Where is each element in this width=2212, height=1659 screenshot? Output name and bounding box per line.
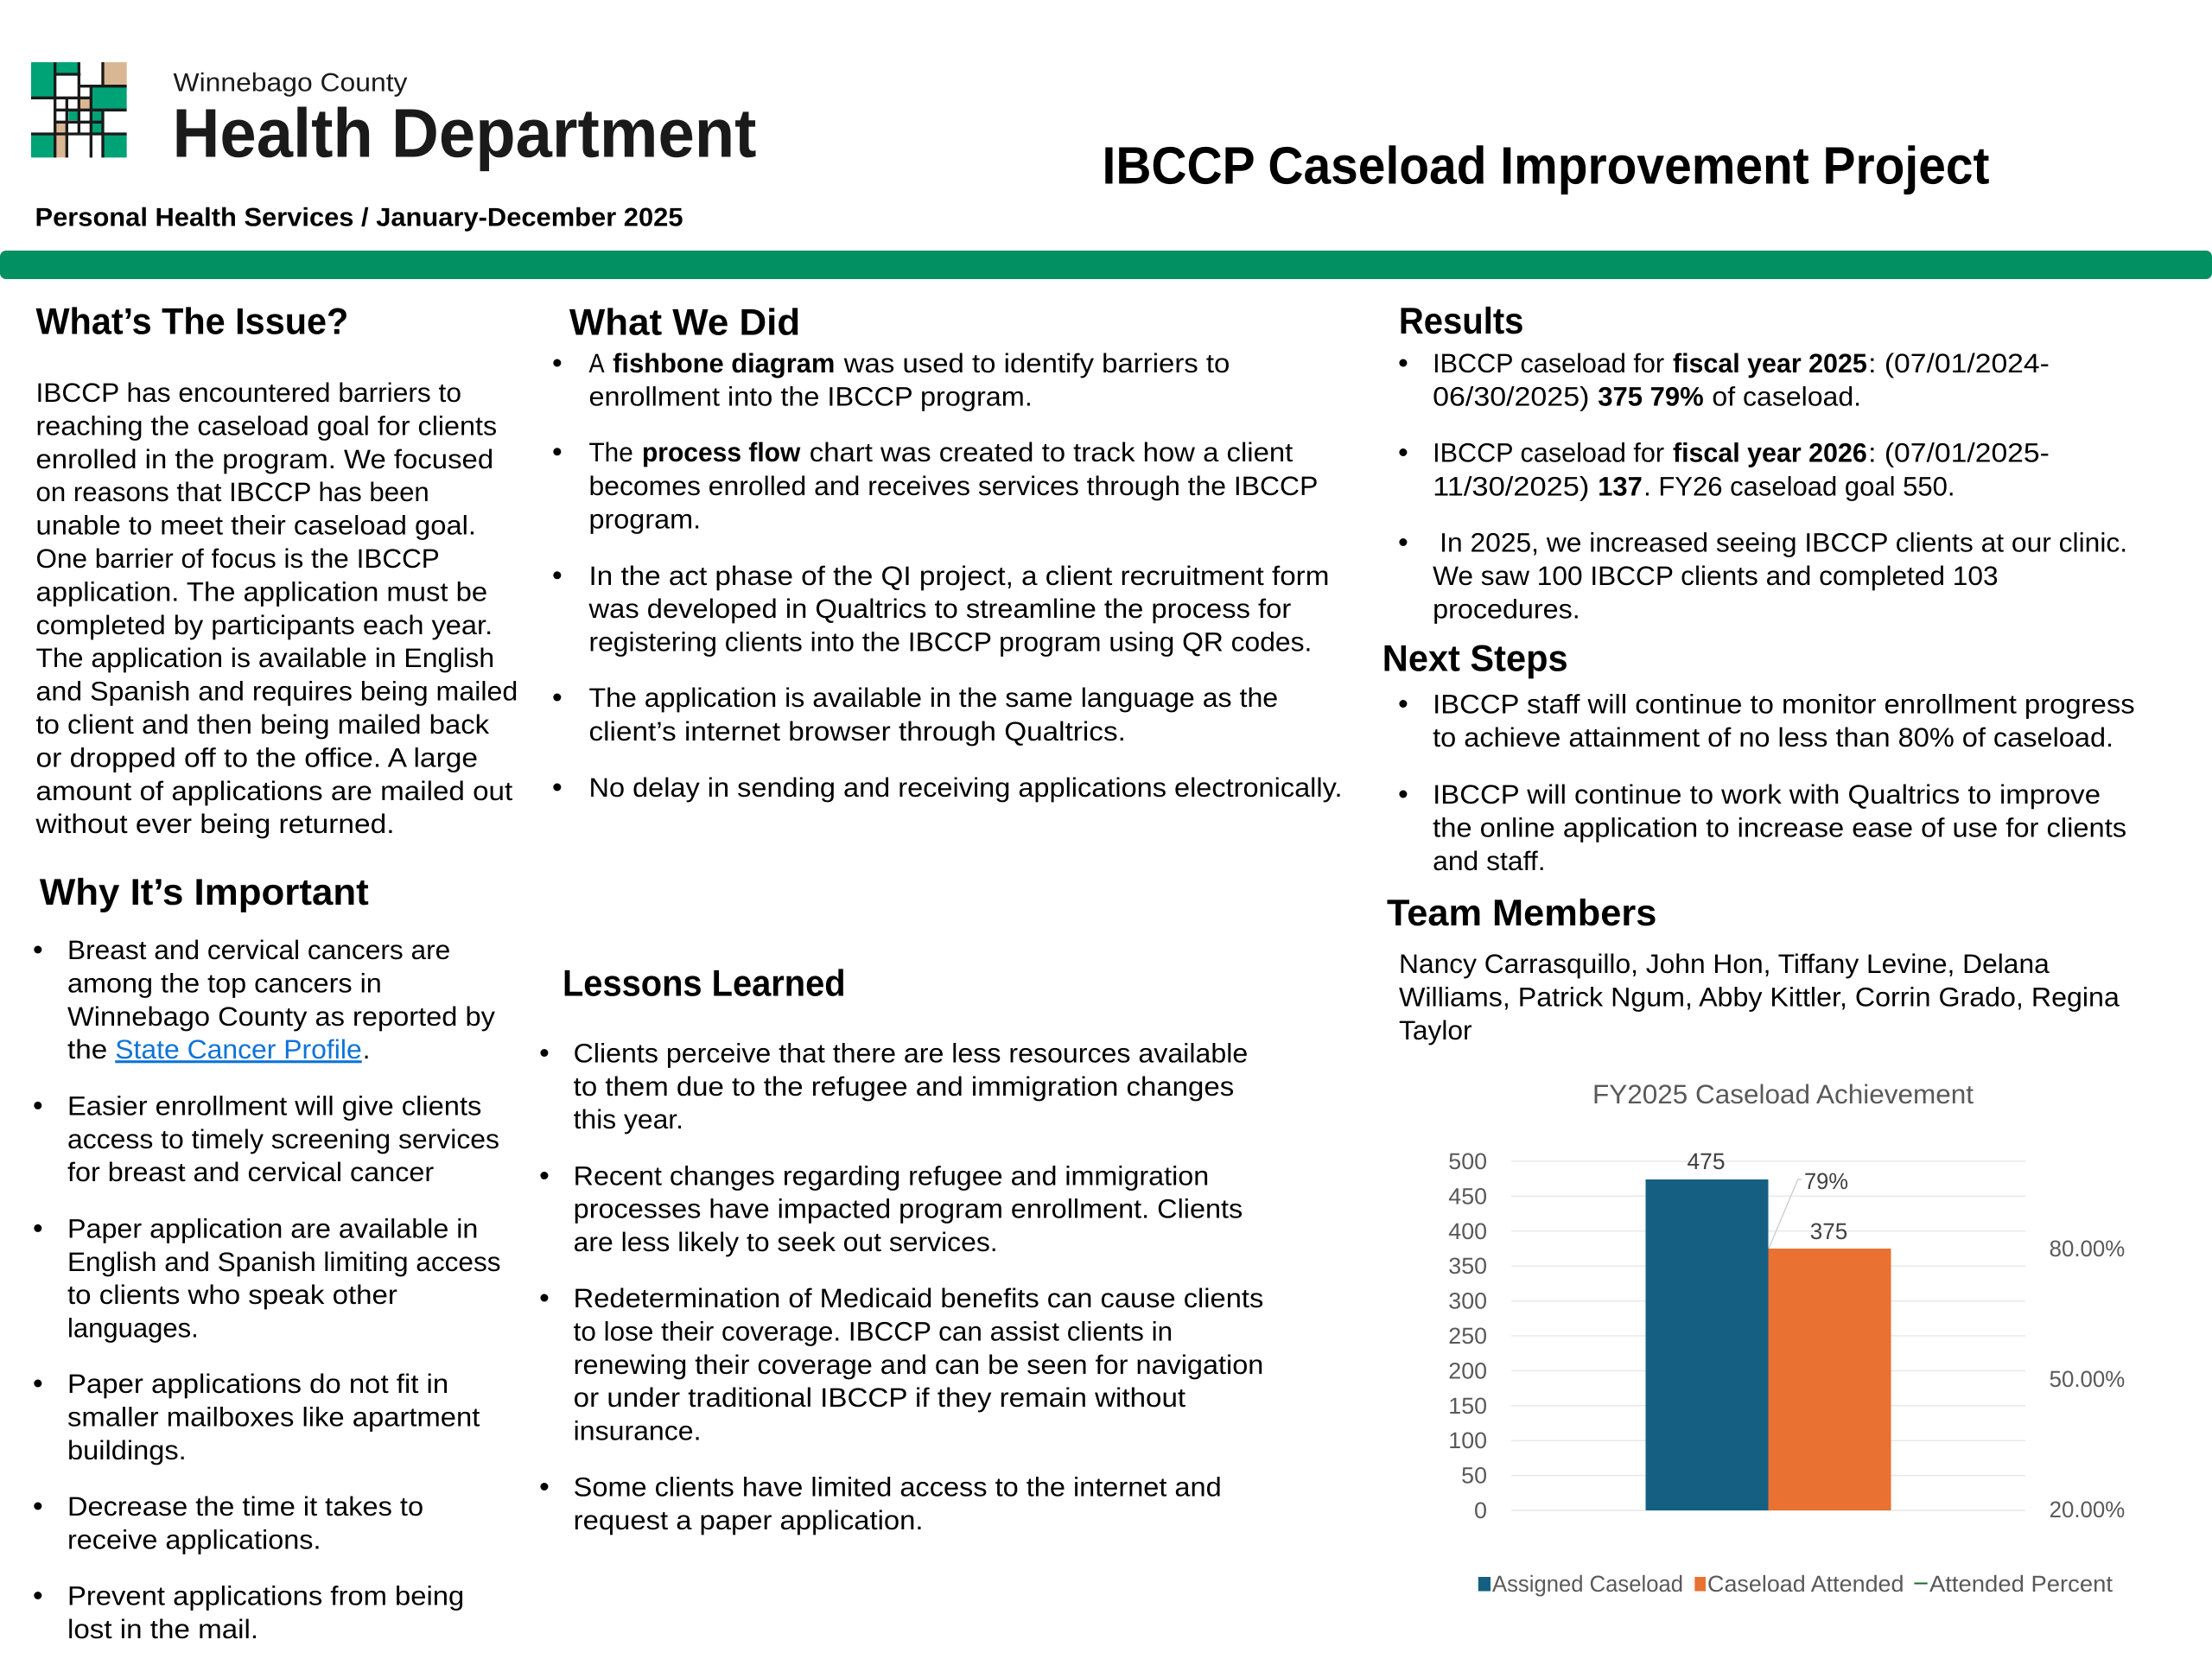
text block: names: Williams, Patrick Ngum, Abby Kittler, Corrin Grado, Regina <box>1399 982 2120 1013</box>
right axis labels: 20.00% <box>2050 1497 2125 1522</box>
list: actions: registering clients into the IBCCP program using QR codes. <box>588 627 1312 658</box>
list: actions: chart was created to track how a client <box>810 437 1294 467</box>
bar: caseload attended 375 <box>1768 1249 1891 1510</box>
list: lessons: renewing their coverage and can be seen for navigation <box>574 1350 1263 1380</box>
text block: names: Taylor <box>1399 1015 1472 1046</box>
list: results: 375 79% <box>1598 381 1704 411</box>
text block: issue description: application. The application must be <box>35 576 487 607</box>
text block: names: Nancy Carrasquillo, John Hon, Tiffany Levine, Delana <box>1399 949 2050 979</box>
list: results: IBCCP caseload for <box>1433 348 1664 378</box>
list: lessons: Some clients have limited access to the internet and <box>574 1472 1222 1502</box>
left axis labels: 50 <box>1461 1463 1487 1489</box>
list: lessons: Recent changes regarding refugee and immigration <box>574 1161 1209 1191</box>
title: IBCCP Caseload Improvement Project <box>1103 137 1989 195</box>
data label 475: 475 <box>1687 1148 1725 1174</box>
list: lessons: Clients perceive that there are less resources available <box>574 1039 1248 1068</box>
list: next steps: and staff. <box>1433 846 1546 876</box>
list: next steps <box>1399 690 2135 876</box>
left axis labels: 300 <box>1448 1288 1487 1314</box>
list: results: : (07/01/2025- <box>1868 437 2050 468</box>
list: reasons: Easier enrollment will give clients <box>67 1090 481 1121</box>
data label 79%: 79% <box>1804 1168 1848 1194</box>
panel: lessons learned <box>540 963 1263 1535</box>
list: lessons: insurance. <box>574 1416 701 1446</box>
list: reasons: Winnebago County as reported by <box>67 1001 495 1032</box>
text block: names <box>1399 949 2120 1046</box>
text block: issue description: completed by participants each year. <box>35 610 493 640</box>
left axis labels: 150 <box>1448 1393 1487 1419</box>
list: reasons: receive applications. <box>67 1524 321 1554</box>
text block: issue description: and Spanish and requires being mailed <box>35 677 518 707</box>
list: results: 06/30/2025) <box>1433 381 1589 411</box>
left axis labels: 200 <box>1448 1357 1487 1383</box>
list: reasons: languages. <box>67 1313 199 1344</box>
list: results: In 2025, we increased seeing IBCCP clients at our clinic. <box>1440 527 2127 558</box>
heading: lessons learned: Lessons Learned <box>563 963 846 1005</box>
left axis labels <box>1448 1148 1487 1523</box>
list: results: : (07/01/2024- <box>1868 348 2050 378</box>
list: next steps: to achieve attainment of no less than 80% of caseload. <box>1433 722 2113 753</box>
list: results: . FY26 caseload goal 550. <box>1643 472 1955 501</box>
list: reasons: the <box>67 1034 107 1065</box>
list: reasons: access to timely screening services <box>67 1124 499 1154</box>
right axis labels <box>2050 1236 2125 1522</box>
list: lessons: this year. <box>574 1104 683 1135</box>
legend <box>1478 1571 2113 1597</box>
panel: results <box>1399 301 2127 624</box>
green divider bar <box>0 251 2212 279</box>
logo text: Winnebago County: Winnebago County <box>173 69 408 97</box>
text block: issue description: One barrier of focus is the IBCCP <box>35 543 440 574</box>
logo text: Health Department: Health Department <box>173 95 757 171</box>
header <box>31 62 1989 232</box>
list: results <box>1399 348 2127 624</box>
bar chart: FY2025 caseload achievement <box>1448 1079 2125 1597</box>
list: actions: becomes enrolled and receives services through the IBCCP <box>588 471 1318 501</box>
list: reasons: English and Spanish limiting access <box>67 1247 500 1277</box>
text block: issue description: without ever being returned. <box>35 809 395 839</box>
list: actions: program. <box>588 505 701 535</box>
heading: next steps: Next Steps <box>1382 638 1568 679</box>
subtitle: Personal Health Services / January-December 2025 <box>35 204 683 232</box>
list: lessons: or under traditional IBCCP if they remain without <box>574 1382 1186 1413</box>
list: next steps: IBCCP staff will continue to monitor enrollment progress <box>1433 690 2135 719</box>
list: reasons: State Cancer Profile <box>115 1034 362 1065</box>
list: reasons: buildings. <box>67 1435 187 1465</box>
list: reasons: Paper application are available in <box>67 1213 478 1243</box>
list: lessons <box>540 1039 1263 1535</box>
list: actions: No delay in sending and receiving applications electronically. <box>588 772 1342 803</box>
list: results: 137 <box>1598 472 1643 501</box>
heading: what's the issue: What’s The Issue? <box>35 301 348 342</box>
list: reasons: to clients who speak other <box>67 1280 397 1310</box>
chart title: FY2025 Caseload Achievement <box>1592 1079 1974 1109</box>
list: lessons: to lose their coverage. IBCCP can assist clients in <box>574 1316 1173 1346</box>
text block: issue description <box>35 378 518 839</box>
list: reasons: Breast and cervical cancers are <box>67 935 450 965</box>
text block: issue description: reaching the caseload goal for clients <box>35 410 497 441</box>
left axis labels: 0 <box>1474 1497 1487 1523</box>
list: next steps: the online application to increase ease of use for clients <box>1433 812 2126 842</box>
left axis labels: 500 <box>1448 1148 1487 1174</box>
list: results: We saw 100 IBCCP clients and completed 103 <box>1433 561 1999 591</box>
heading: what we did: What We Did <box>569 302 800 344</box>
list: reasons: Paper applications do not fit in <box>67 1369 448 1399</box>
data label 375: 375 <box>1810 1218 1847 1244</box>
list: reasons: smaller mailboxes like apartment <box>67 1402 480 1432</box>
list: reasons: Prevent applications from being <box>67 1581 464 1611</box>
text block: issue description: enrolled in the program. We focused <box>35 444 493 474</box>
icon: county logo mark <box>31 62 127 157</box>
list: actions: client’s internet browser through Qualtrics. <box>588 716 1126 747</box>
left axis labels: 450 <box>1448 1183 1487 1209</box>
list: results: 11/30/2025) <box>1433 472 1589 501</box>
heading: results: Results <box>1399 301 1523 342</box>
text block: issue description: amount of applications are mailed out <box>35 776 513 806</box>
left axis labels: 250 <box>1448 1323 1487 1349</box>
list: actions <box>553 348 1342 803</box>
list: lessons: Redetermination of Medicaid benefits can cause clients <box>574 1283 1263 1313</box>
list: reasons: . <box>363 1034 370 1065</box>
list: actions: The <box>588 437 633 467</box>
list: lessons: request a paper application. <box>574 1505 924 1535</box>
list: actions: The application is available in the same language as the <box>588 683 1278 713</box>
text block: issue description: on reasons that IBCCP has been <box>35 477 429 507</box>
right axis labels: 50.00% <box>2050 1366 2125 1392</box>
list: reasons: Decrease the time it takes to <box>67 1491 423 1522</box>
panel: team members <box>1387 893 2120 1046</box>
list: actions: enrollment into the IBCCP program. <box>588 381 1033 411</box>
list: reasons: lost in the mail. <box>67 1614 258 1644</box>
list: results: IBCCP caseload for <box>1433 437 1664 468</box>
list: actions: fishbone diagram <box>613 348 835 378</box>
panel: what's the issue <box>35 301 518 839</box>
list: results: procedures. <box>1433 594 1580 624</box>
text block: issue description: to client and then being mailed back <box>35 709 490 740</box>
heading: team members: Team Members <box>1387 893 1656 934</box>
panel: what we did <box>553 302 1342 803</box>
list: lessons: to them due to the refugee and immigration changes <box>574 1071 1234 1102</box>
legend: Assigned Caseload <box>1492 1571 1683 1597</box>
list: actions: was used to identify barriers to <box>843 348 1230 378</box>
text block: issue description: IBCCP has encountered barriers to <box>35 378 461 408</box>
legend: Attended Percent <box>1929 1571 2113 1597</box>
left axis labels: 400 <box>1448 1218 1487 1244</box>
list: results: fiscal year 2026 <box>1673 437 1867 468</box>
list: actions: A <box>588 348 605 378</box>
leader line <box>1769 1179 1802 1249</box>
legend: Caseload Attended <box>1707 1571 1904 1597</box>
left axis labels: 100 <box>1448 1427 1487 1453</box>
list: results: fiscal year 2025 <box>1673 348 1867 378</box>
list: reasons: for breast and cervical cancer <box>67 1157 434 1187</box>
list: reasons <box>34 935 500 1644</box>
list: actions: In the act phase of the QI project, a client recruitment form <box>588 561 1329 591</box>
bar: assigned caseload 475 <box>1645 1179 1768 1510</box>
list: results: of caseload. <box>1712 381 1861 411</box>
text block: issue description: or dropped off to the office. A large <box>35 742 478 772</box>
left axis labels: 350 <box>1448 1253 1487 1279</box>
list: next steps: IBCCP will continue to work with Qualtrics to improve <box>1433 779 2101 810</box>
text block: issue description: unable to meet their caseload goal. <box>35 511 476 541</box>
list: lessons: processes have impacted program enrollment. Clients <box>574 1194 1243 1224</box>
list: actions: was developed in Qualtrics to streamline the process for <box>588 594 1291 624</box>
panel: why it's important <box>34 872 500 1644</box>
list: actions: process flow <box>642 437 801 467</box>
list: reasons: among the top cancers in <box>67 968 382 998</box>
heading: why it's important: Why It’s Important <box>40 872 369 913</box>
right axis labels: 80.00% <box>2050 1236 2125 1262</box>
text block: issue description: The application is available in English <box>35 643 494 673</box>
panel: next steps <box>1382 638 2135 876</box>
list: lessons: are less likely to seek out services. <box>574 1227 998 1257</box>
